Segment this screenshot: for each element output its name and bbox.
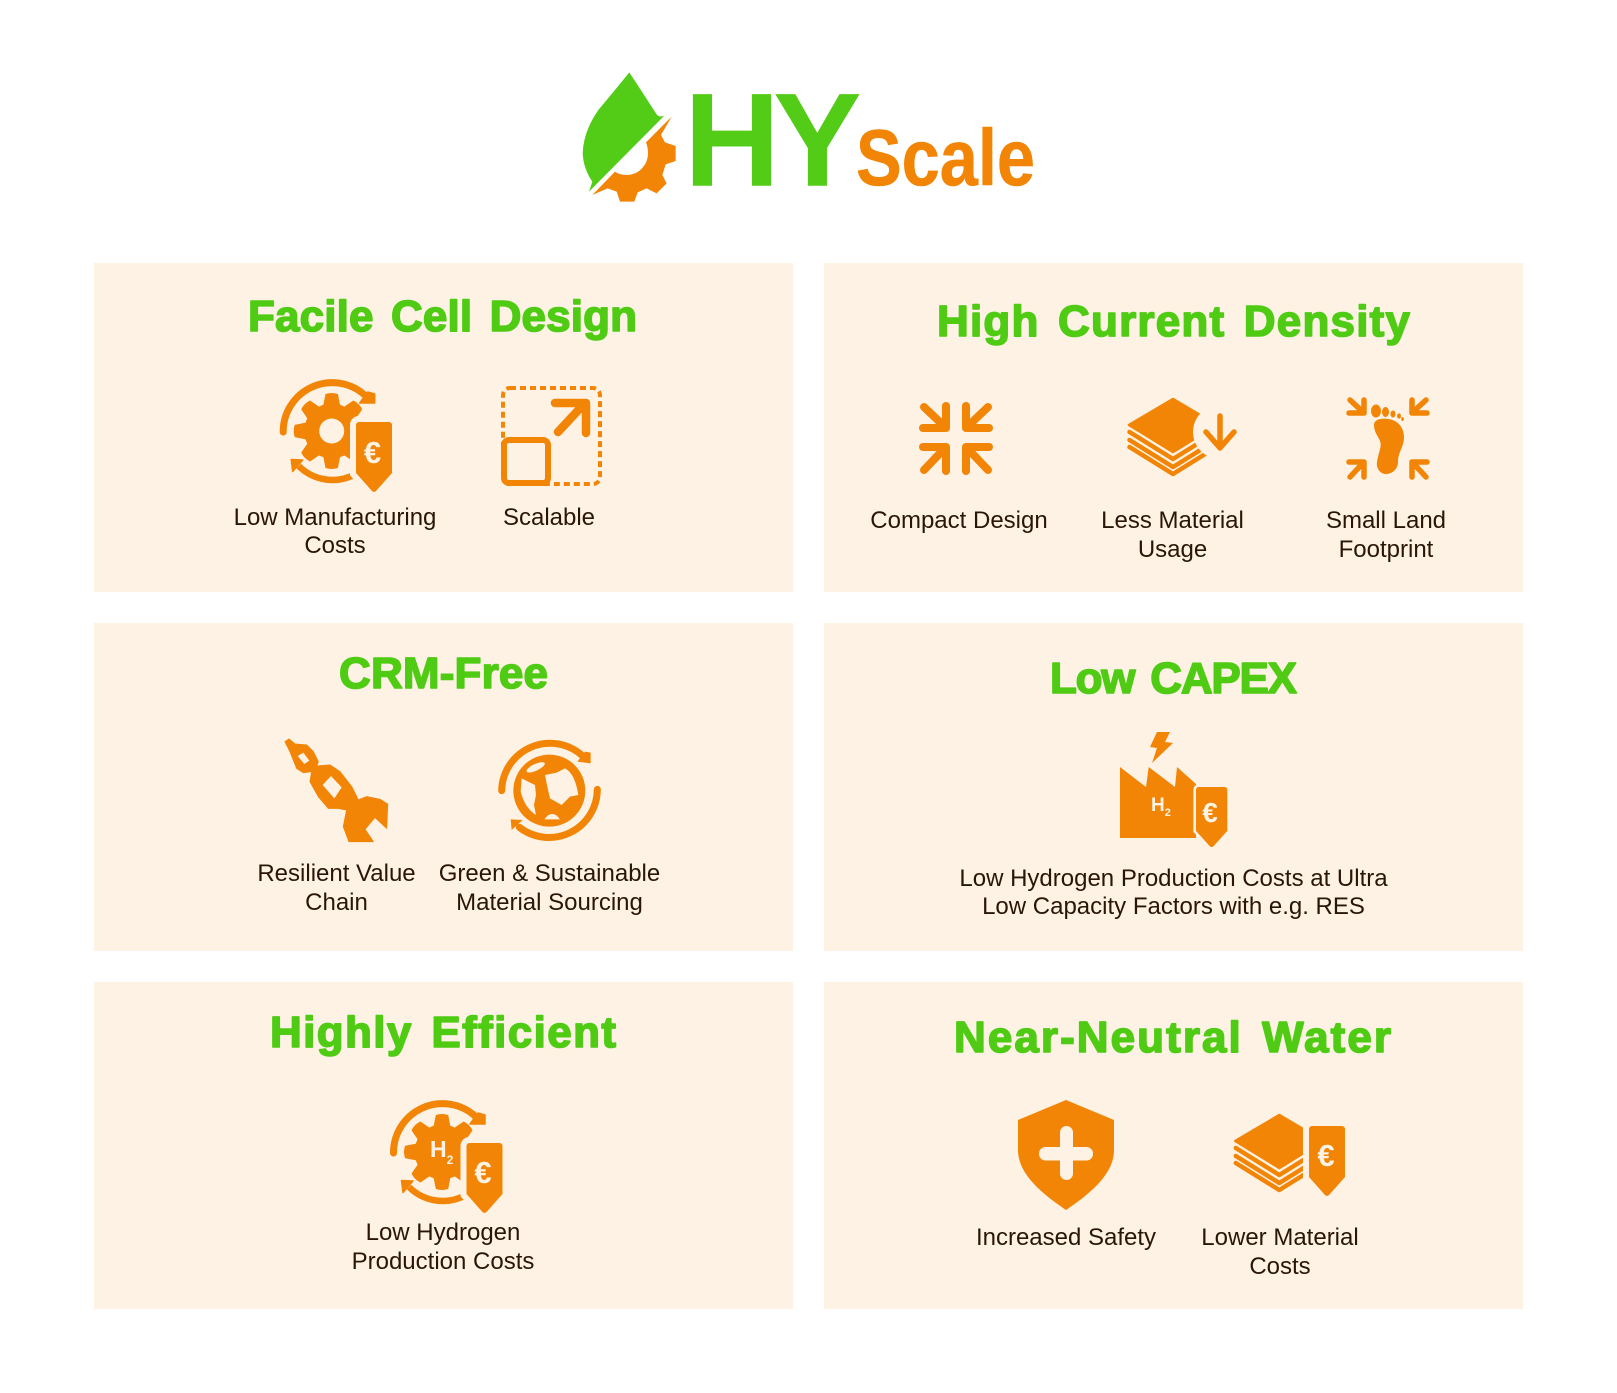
panel: Highly Efficient xyxy=(94,982,793,1309)
icon: H2 factory with lightning and euro tag xyxy=(1120,732,1227,847)
panel: CRM-Free xyxy=(94,623,793,951)
icon: H2 gear with euro tag: H xyxy=(430,1136,447,1162)
label: Low Hydrogen Production Costs: Production Costs xyxy=(352,1248,534,1275)
label: Low Hydrogen Production Costs: Low Hydrogen xyxy=(366,1219,520,1246)
label: Increased Safety: Increased Safety xyxy=(976,1224,1156,1251)
icon: shield with cross xyxy=(1018,1100,1114,1210)
label: Compact Design: Compact Design xyxy=(870,507,1048,534)
label: Low Hydrogen Production Costs at Ultra Low Capacity Factors: Low Capacity Factors with e.g. RES xyxy=(982,893,1365,920)
logo xyxy=(583,67,1035,215)
label: Low Manufacturing Costs: Low Manufacturing xyxy=(234,504,436,531)
label: Small Land Footprint: Footprint xyxy=(1339,536,1434,563)
label: Low Manufacturing Costs: Costs xyxy=(304,532,366,559)
label: Lower Material Costs: Costs xyxy=(1249,1253,1311,1280)
heading: Facile Cell Design: Facile Cell Design xyxy=(248,292,637,341)
icon: footprint with arrows xyxy=(1349,400,1427,477)
label: Lower Material Costs: Lower Material xyxy=(1201,1224,1359,1251)
label: Green & Sustainable Material Sourcing: Green & Sustainable xyxy=(439,860,660,887)
icon: globe with cycle arrows xyxy=(502,743,597,837)
logo wordmark: HY: HY xyxy=(684,67,862,215)
icon: material stack with euro tag: € xyxy=(1317,1138,1335,1173)
icon: material stack with euro tag xyxy=(1235,1115,1348,1200)
icon: compact arrows xyxy=(923,406,989,471)
logo icon: half gear xyxy=(592,117,676,202)
heading: High Current Density: High Current Density xyxy=(937,297,1411,346)
label: Small Land Footprint: Small Land xyxy=(1326,507,1446,534)
heading: Near-Neutral Water: Near-Neutral Water xyxy=(954,1013,1391,1062)
icon: gear with euro tag: € xyxy=(364,435,381,470)
icon: scalable xyxy=(503,388,600,484)
icon: gear with euro tag xyxy=(283,383,392,492)
icon: H2 factory with lightning and euro tag: € xyxy=(1202,797,1218,828)
label: Scalable: Scalable xyxy=(503,504,595,531)
heading: Low CAPEX: Low CAPEX xyxy=(1050,654,1297,703)
icon: material stack with down arrow xyxy=(1129,399,1247,474)
panel: Facile Cell Design xyxy=(94,263,793,592)
panel: High Current Density xyxy=(824,263,1523,592)
label: Resilient Value Chain: Chain xyxy=(305,889,368,916)
logo icon: leaf drop xyxy=(583,72,664,192)
heading: CRM-Free: CRM-Free xyxy=(339,649,548,698)
logo wordmark: Scale: Scale xyxy=(856,113,1035,202)
icon: H2 factory with lightning and euro tag: 2 xyxy=(1165,807,1171,819)
label: Less Material Usage: Usage xyxy=(1138,536,1207,563)
panel: Low CAPEX xyxy=(824,623,1523,951)
icon: H2 gear with euro tag xyxy=(393,1104,502,1213)
heading: Highly Efficient: Highly Efficient xyxy=(270,1008,616,1057)
panel: Near-Neutral Water xyxy=(824,982,1523,1309)
icon: chain link xyxy=(285,739,388,842)
icon: H2 gear with euro tag: € xyxy=(474,1155,492,1190)
icon: H2 factory with lightning and euro tag: H xyxy=(1151,795,1165,816)
icon: H2 gear with euro tag: 2 xyxy=(447,1153,454,1167)
label: Resilient Value Chain: Resilient Value xyxy=(257,860,416,887)
label: Less Material Usage: Less Material xyxy=(1101,507,1244,534)
label: Low Hydrogen Production Costs at Ultra Low Capacity Factors: Low Hydrogen Production Costs at Ultra xyxy=(959,865,1388,892)
label: Green & Sustainable Material Sourcing: Material Sourcing xyxy=(456,889,643,916)
